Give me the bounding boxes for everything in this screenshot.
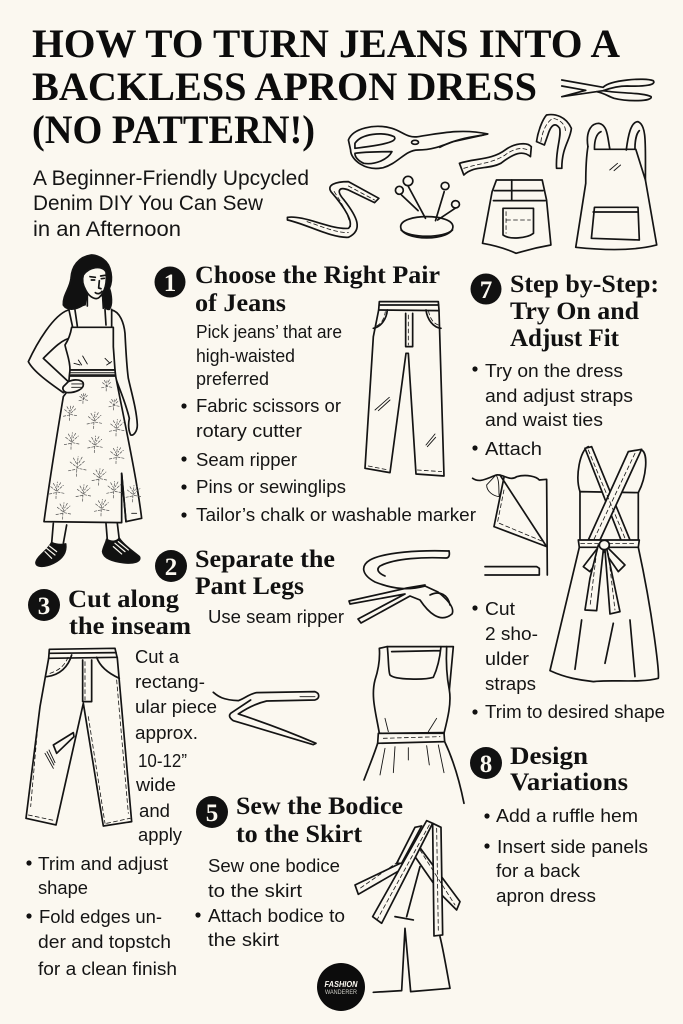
step 1 text: Pins or sewinglips [196, 476, 346, 497]
heading 8: Design [510, 743, 588, 770]
panel: step 7 [470, 271, 665, 722]
shoes [36, 538, 140, 566]
panel: step 2 [155, 546, 453, 627]
step 5 text [195, 855, 345, 950]
logo: WANDERER [325, 990, 358, 996]
icon: measuring tape 1 [287, 182, 379, 237]
panel: step 1 [154, 262, 476, 525]
step 1 text [181, 321, 476, 525]
title: HOW TO TURN JEANS INTO A [32, 21, 620, 66]
icon: seam ripper [213, 692, 319, 745]
heading 8: Variations [510, 769, 628, 796]
dress and body [28, 309, 142, 543]
step 3 narrow text: and [139, 800, 170, 821]
step 3 bullets: Fold edges un- [39, 906, 162, 927]
badge 1 [154, 266, 186, 298]
icon: shears [562, 79, 654, 101]
icon: square-neck bodice dress [364, 647, 464, 803]
heading 3: Cut along [68, 586, 180, 613]
icon: apron [576, 122, 657, 250]
icon: fabric shears [349, 551, 453, 623]
icon: measuring tape 2 [459, 144, 531, 175]
icon: measuring tape 3 [537, 115, 571, 168]
heading 1 [195, 262, 440, 317]
icon: folded hem detail [473, 475, 547, 575]
icon: crossed straps and skirt [355, 821, 460, 992]
step 8 text: for a back [496, 860, 581, 881]
step 5 text: to the skirt [208, 880, 302, 901]
step 1 text: Fabric scissors or [196, 395, 341, 416]
icon: pincushion [395, 176, 459, 238]
step 7 text: Attach [485, 438, 542, 459]
icon: jeans cut open [26, 648, 132, 826]
step 8 text: Add a ruffle hem [496, 805, 638, 826]
subtitle [33, 167, 309, 241]
badge 8 [470, 747, 502, 779]
heading 8 [510, 743, 628, 796]
step 3 narrow text [135, 646, 217, 845]
logo: FASHION [324, 979, 358, 989]
heading 7: Adjust Fit [510, 325, 620, 352]
step 7 text [472, 360, 633, 459]
step 7 text: and adjust straps [485, 385, 633, 406]
panel: step 8 [470, 743, 648, 906]
step 7 text: Try on the dress [485, 360, 623, 381]
heading 1: Choose the Right Pair [195, 262, 440, 289]
step 3 bullets: shape [38, 877, 88, 898]
step 2 text: Use seam ripper [208, 606, 344, 627]
step 7 second text: ulder [485, 648, 529, 669]
step 3 narrow text: approx. [135, 722, 198, 743]
panel: step 5 [195, 647, 464, 992]
badge 7 [470, 274, 502, 304]
subtitle: Denim DIY You Can Sew [33, 192, 264, 215]
step 8 text [484, 805, 648, 906]
heading 7 [510, 271, 659, 352]
step 5 text: Sew one bodice [208, 855, 340, 876]
panel: step 3 [26, 586, 319, 979]
step 1 text: preferred [196, 368, 269, 389]
tools illustration group [287, 79, 657, 253]
step 1 text: Seam ripper [196, 449, 297, 470]
heading 2: Pant Legs [195, 573, 304, 600]
skirt floral print [49, 379, 141, 519]
heading 3: the inseam [69, 613, 191, 640]
heading 7: Step by-Step: [510, 271, 659, 298]
step 3 narrow text: 10-12” [138, 750, 187, 771]
hair and face [63, 255, 111, 309]
step 3 narrow text: wide [135, 774, 176, 795]
step 7 second text [472, 598, 665, 722]
heading 5 [236, 793, 403, 848]
icon: denim pocket [483, 180, 551, 253]
title: BACKLESS APRON DRESS [32, 64, 537, 109]
step 7 second text: Cut [485, 598, 515, 619]
title: (NO PATTERN!) [32, 107, 315, 152]
badge 8: 8 [480, 751, 492, 778]
step 1 text: Pick jeans’ that are [196, 321, 342, 342]
badge 3 [28, 589, 60, 621]
heading 2: Separate the [195, 546, 335, 573]
step 8 text: apron dress [496, 885, 596, 906]
heading 5: Sew the Bodice [236, 793, 403, 820]
heading 1: of Jeans [195, 290, 286, 317]
step 3 bullets [26, 853, 177, 979]
step 7 second text: Trim to desired shape [485, 701, 665, 722]
badge 7: 7 [480, 277, 492, 304]
heading 5: to the Skirt [236, 821, 363, 848]
icon: cross-back apron dress [550, 447, 658, 682]
step 1 text: rotary cutter [196, 420, 302, 441]
heading 2 [195, 546, 335, 600]
step 5 text: the skirt [208, 929, 279, 950]
badge 2: 2 [165, 554, 177, 581]
step 5 text: Attach bodice to [208, 905, 345, 926]
icon: jeans front [365, 302, 444, 476]
step 7 text: and waist ties [485, 409, 603, 430]
step 3 bullets: der and topstch [38, 931, 171, 952]
step 3 narrow text: rectang- [135, 671, 205, 692]
badge 2 [155, 550, 187, 582]
icon: scissors [348, 126, 488, 168]
step 3 narrow text: Cut a [135, 646, 180, 667]
step 3 bullets: Trim and adjust [38, 853, 168, 874]
title [32, 21, 620, 152]
woman illustration [28, 255, 142, 566]
step 7 second text: straps [485, 673, 536, 694]
step 7 second text: 2 sho- [485, 623, 538, 644]
heading 3 [68, 586, 191, 640]
badge 1: 1 [164, 270, 176, 297]
badge 5: 5 [206, 800, 218, 827]
step 3 bullets: for a clean finish [38, 958, 177, 979]
subtitle: in an Afternoon [33, 218, 181, 241]
step 3 narrow text: ular piece [135, 696, 217, 717]
step 3 narrow text: apply [138, 824, 183, 845]
step 1 text: Tailor’s chalk or washable marker [196, 504, 476, 525]
subtitle: A Beginner-Friendly Upcycled [33, 167, 309, 190]
logo [317, 963, 365, 1011]
badge 3: 3 [38, 593, 50, 620]
heading 7: Try On and [510, 298, 639, 325]
step 8 text: Insert side panels [497, 836, 648, 857]
badge 5 [196, 796, 228, 828]
step 1 text: high-waisted [196, 345, 295, 366]
